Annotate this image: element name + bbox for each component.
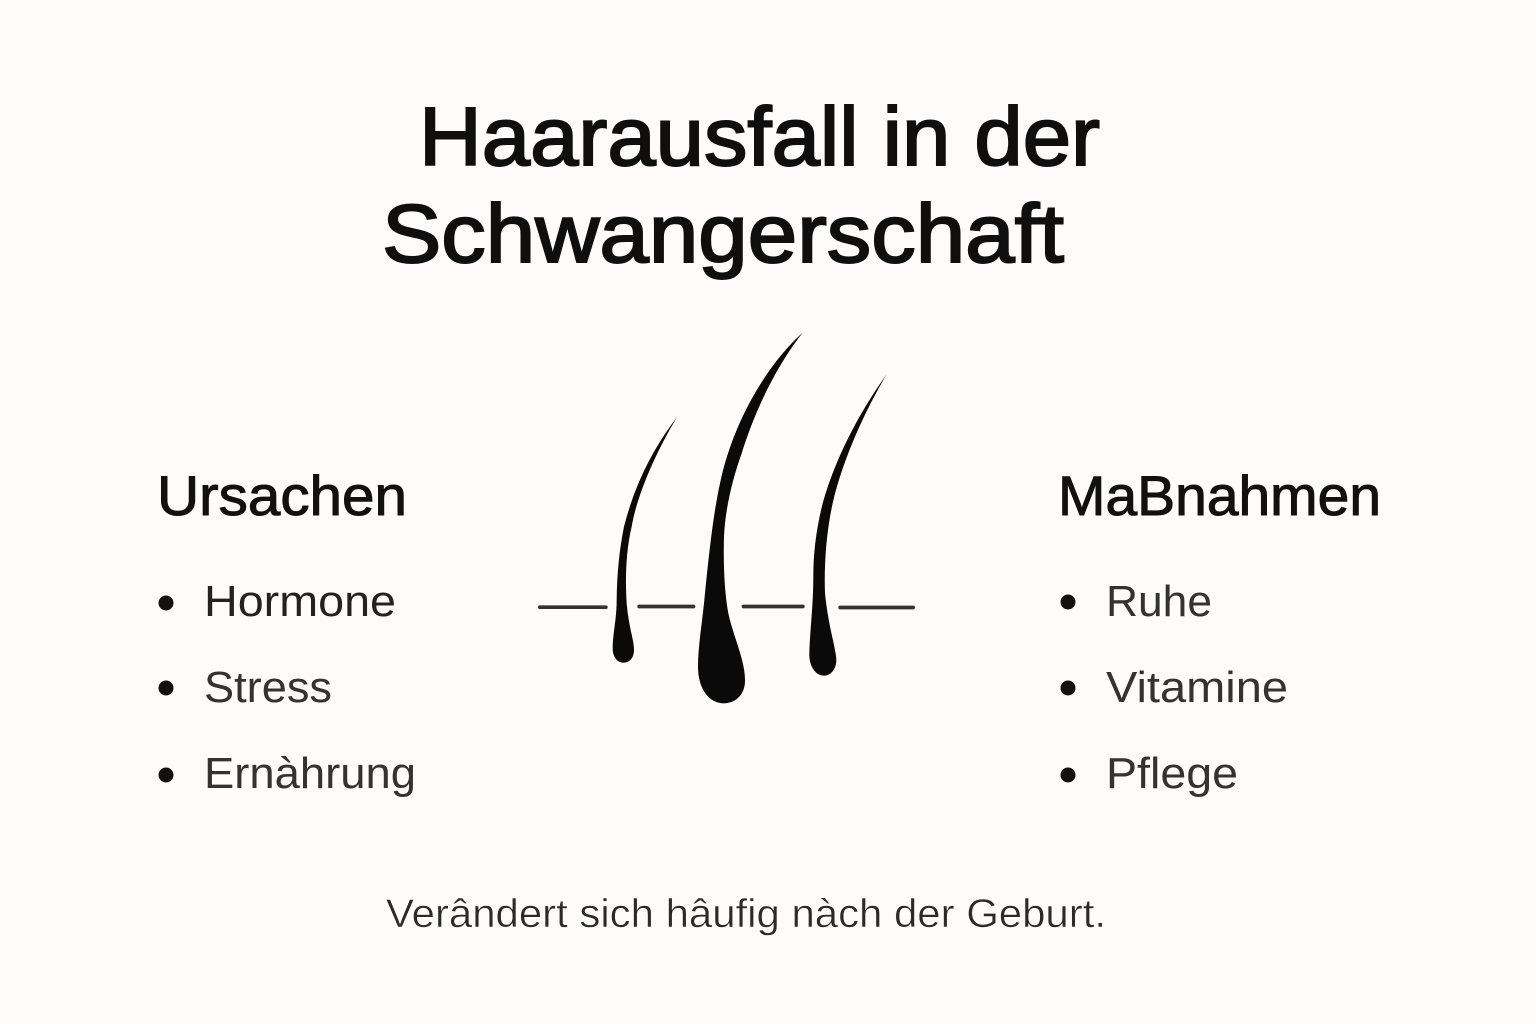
panel: Maßnahmen (1058, 464, 1381, 798)
title (382, 90, 1100, 280)
skin line segments (538, 605, 915, 609)
icon: left hair (613, 417, 677, 663)
heading: Ursachen: Ursachen (157, 464, 407, 527)
icon: right hair (809, 374, 887, 676)
title: Schwangerschaft (382, 187, 1064, 280)
panel: Ursachen (157, 464, 416, 798)
list item: Ruhe (1060, 577, 1212, 626)
list item: Stress: Stress (204, 663, 332, 712)
list item: Vitamine: Vitamine (1106, 663, 1288, 712)
list item: Ernàhrung: Ernàhrung (204, 749, 416, 798)
footer note: Verândert sich hâufig nàch der Geburt. (386, 892, 1106, 936)
list item: Pflege: Pflege (1106, 749, 1238, 798)
list item: Hormone: Hormone (204, 577, 396, 626)
list item: Ruhe: Ruhe (1106, 577, 1212, 626)
title: Haarausfall in der (419, 90, 1100, 183)
heading: MaBnahmen: MaBnahmen (1058, 464, 1381, 527)
illustration: hair follicles in skin (538, 333, 915, 703)
icon: center hair (698, 333, 803, 703)
